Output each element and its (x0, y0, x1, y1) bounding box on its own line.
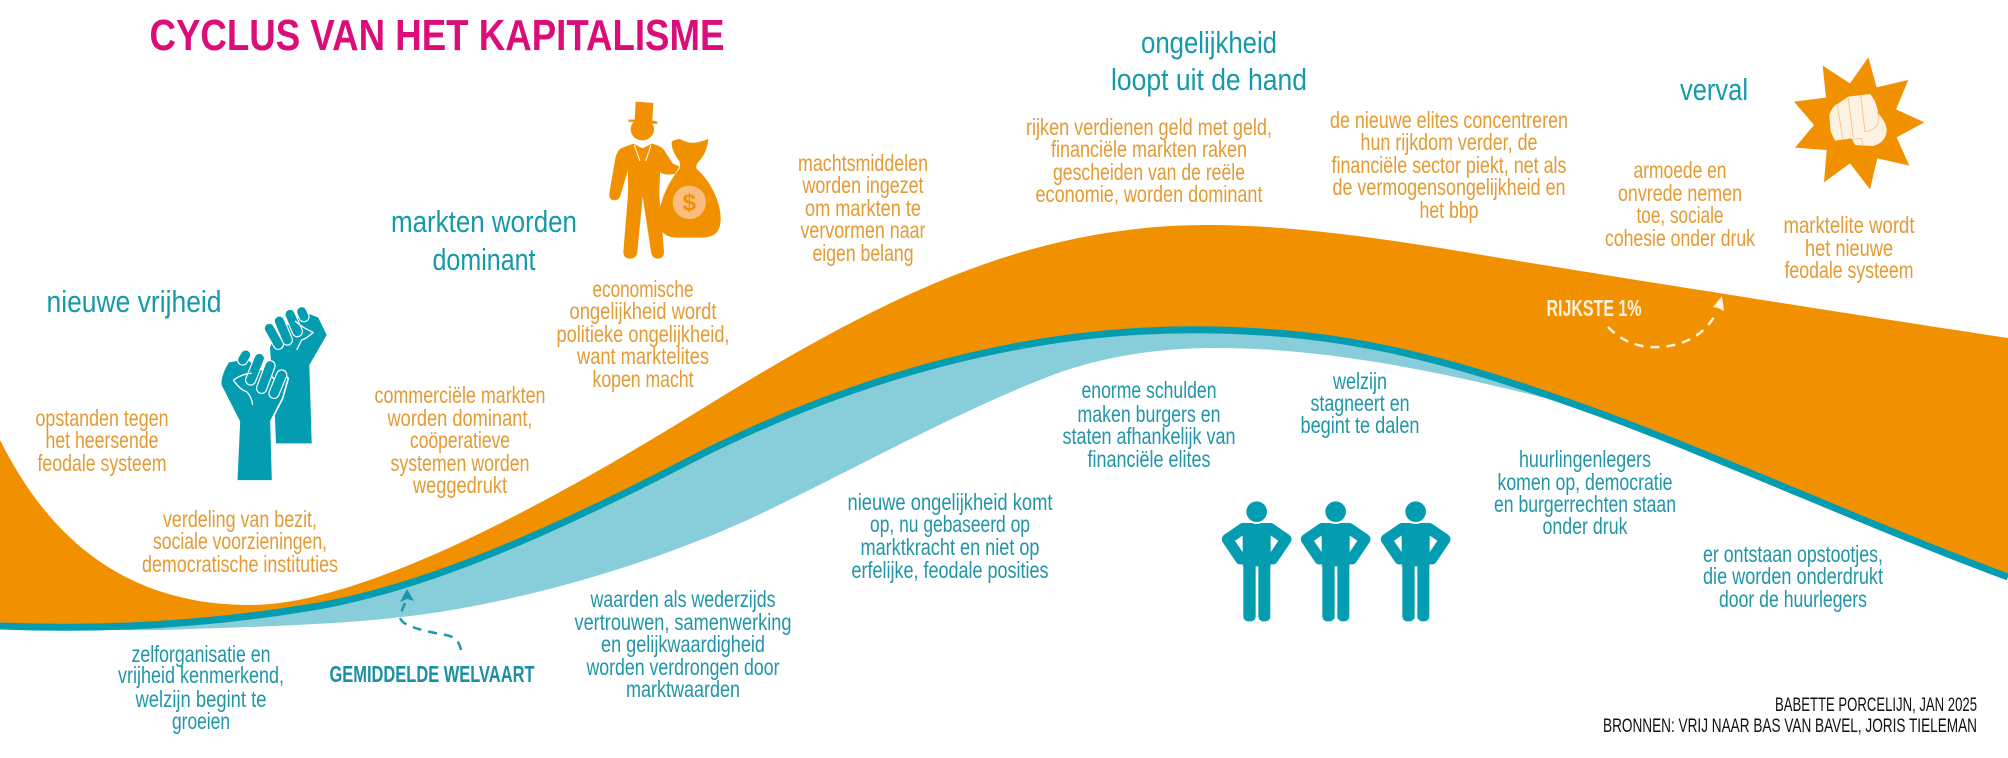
text: rijken verdienen: rijken verdienen geld met geld, (1026, 114, 1272, 140)
text: waarden: waarden als wederzijds (590, 586, 776, 612)
text: economische ongelijkheid: ongelijkheid wordt (570, 298, 717, 324)
text: armoede: cohesie onder druk (1605, 225, 1755, 251)
person 2 (1306, 500, 1365, 621)
text: rijken verdienen (1026, 114, 1272, 207)
text: huurlingenlegers: huurlingenlegers (1519, 446, 1651, 472)
text: welzijn stagneert (1300, 368, 1420, 438)
text: machtsmiddelen: worden ingezet (802, 172, 924, 198)
text: marktelite (1784, 212, 1915, 283)
text: nieuwe elites: de vermogensongelijkheid en (1332, 174, 1566, 200)
text: verdeling van bezit: democratische instituties (142, 551, 338, 577)
text: machtsmiddelen: vervormen naar (800, 217, 926, 243)
text: welzijn stagneert: welzijn (1332, 368, 1387, 394)
text: opstootjes: die worden onderdrukt (1703, 563, 1883, 589)
text: huurlingenlegers (1494, 446, 1676, 539)
teal line: average prosperity (0, 330, 2008, 627)
text: enorme schulden: enorme schulden (1082, 377, 1216, 403)
text: nieuwe elites (1330, 107, 1568, 223)
text: opstanden: feodale systeem (38, 450, 166, 476)
text: opstootjes: er ontstaan opstootjes, (1703, 541, 1883, 567)
text: economische ongelijkheid (556, 276, 730, 392)
icon: man with top hat and money bag (609, 102, 721, 259)
text: enorme schulden (1062, 377, 1236, 472)
text: zelforganisatie: zelforganisatie en (132, 641, 270, 667)
text: economische ongelijkheid: kopen macht (592, 366, 694, 392)
heading: markten worden dominant: dominant (432, 242, 536, 277)
title: CYCLUS VAN HET KAPITALISME (150, 11, 724, 60)
credits (1603, 695, 1977, 737)
text: waarden: marktwaarden (626, 676, 740, 702)
text: nieuwe ongelijkheid (848, 489, 1053, 583)
text: armoede: onvrede nemen (1618, 180, 1742, 206)
text: economische ongelijkheid: politieke ongelijkheid, (556, 321, 730, 347)
text: huurlingenlegers: komen op, democratie (1498, 469, 1672, 495)
text: verdeling van bezit (142, 506, 338, 577)
text: economische ongelijkheid: want marktelites (576, 343, 709, 369)
text: commerciële markten: coöperatieve (410, 427, 510, 453)
text: enorme schulden: financiële elites (1088, 446, 1210, 472)
text: zelforganisatie: groeien (172, 708, 230, 734)
person 3 (1386, 500, 1445, 621)
icon: raised fists (221, 312, 327, 481)
text: waarden: worden verdrongen door (586, 654, 780, 680)
text: commerciële markten: weggedrukt (412, 472, 507, 498)
text: welzijn stagneert: stagneert en (1310, 390, 1410, 416)
icon: man with top hat and money bag: $ (683, 190, 696, 217)
text: commerciële markten (374, 382, 546, 498)
text: verdeling van bezit: sociale voorzieningen, (153, 528, 327, 554)
text: opstanden (36, 405, 168, 476)
text: zelforganisatie (118, 641, 284, 734)
text: waarden: vertrouwen, samenwerking (574, 609, 792, 635)
text: armoede: toe, sociale (1636, 202, 1724, 228)
heading: markten worden dominant: markten worden (391, 204, 577, 239)
label: rijkste 1%: RIJKSTE 1% (1546, 295, 1642, 321)
text: nieuwe elites: financiële sector piekt, net als (1332, 152, 1566, 178)
text: nieuwe elites: het bbp (1420, 197, 1478, 223)
text: nieuwe ongelijkheid: op, nu gebaseerd op (870, 511, 1030, 537)
text: commerciële markten: worden dominant, (387, 405, 532, 431)
text: verdeling van bezit: verdeling van bezit, (163, 506, 317, 532)
arrow: to richest 1% curve (1608, 296, 1724, 347)
orange band: richest 1% (0, 225, 2008, 758)
heading: verval: verval (1680, 72, 1748, 107)
heading: ongelijkheid loopt uit de hand: ongelijkheid (1141, 25, 1277, 60)
text: nieuwe elites: hun rijkdom verder, de (1360, 129, 1538, 155)
text: nieuwe elites: de nieuwe elites concentreren (1330, 107, 1568, 133)
text: rijken verdienen: economie, worden dominant (1036, 181, 1263, 207)
text: enorme schulden: staten afhankelijk van (1062, 423, 1236, 449)
text: armoede: armoede en (1634, 157, 1726, 183)
text: zelforganisatie: welzijn begint te (135, 686, 266, 712)
heading: markten worden dominant (391, 204, 577, 277)
heading: nieuwe vrijheid: nieuwe vrijheid (46, 284, 222, 319)
arrow: to average prosperity line (400, 589, 461, 650)
text: zelforganisatie: vrijheid kenmerkend, (118, 662, 284, 688)
icon: fist in star burst (1794, 57, 1924, 189)
text: huurlingenlegers: en burgerrechten staan (1494, 491, 1676, 517)
text: rijken verdienen: financiële markten raken (1051, 136, 1247, 162)
text: huurlingenlegers: onder druk (1542, 513, 1628, 539)
heading: ongelijkheid loopt uit de hand (1111, 25, 1307, 97)
white area below the wellbeing curve (0, 348, 2008, 758)
text: machtsmiddelen: machtsmiddelen (798, 150, 928, 176)
text: opstootjes: door de huurlegers (1719, 586, 1867, 612)
text: waarden: en gelijkwaardigheid (601, 631, 765, 657)
text: machtsmiddelen (798, 150, 928, 266)
text: commerciële markten: systemen worden (390, 450, 530, 476)
text: commerciële markten: commerciële markten (374, 382, 546, 408)
text: economische ongelijkheid: economische (592, 276, 694, 302)
heading: ongelijkheid loopt uit de hand: loopt uit de hand (1111, 62, 1307, 97)
text: nieuwe ongelijkheid: nieuwe ongelijkheid komt (848, 489, 1053, 515)
text: enorme schulden: maken burgers en (1078, 401, 1220, 427)
text: machtsmiddelen: eigen belang (812, 240, 914, 266)
text: nieuwe ongelijkheid: erfelijke, feodale posities (852, 557, 1048, 583)
text: opstanden: het heersende (46, 427, 158, 453)
text: marktelite: marktelite wordt (1784, 212, 1915, 238)
light blue band: wellbeing gap (0, 330, 2008, 758)
text: opstootjes (1703, 541, 1883, 612)
text: armoede (1605, 157, 1755, 251)
text: nieuwe ongelijkheid: marktkracht en niet op (860, 534, 1040, 560)
text: opstanden: opstanden tegen (36, 405, 168, 431)
person 1 (1227, 500, 1286, 621)
text: marktelite: feodale systeem (1784, 257, 1914, 283)
text: machtsmiddelen: om markten te (805, 195, 921, 221)
chart: wave of wealth curves (0, 225, 2008, 758)
text: waarden (574, 586, 792, 702)
text: marktelite: het nieuwe (1805, 235, 1893, 261)
icon: three people, hands on hips (1227, 500, 1445, 621)
text: welzijn stagneert: begint te dalen (1300, 412, 1420, 438)
text: rijken verdienen: gescheiden van de reële (1053, 159, 1245, 185)
label: gemiddelde welvaart: GEMIDDELDE WELVAART (330, 661, 534, 687)
